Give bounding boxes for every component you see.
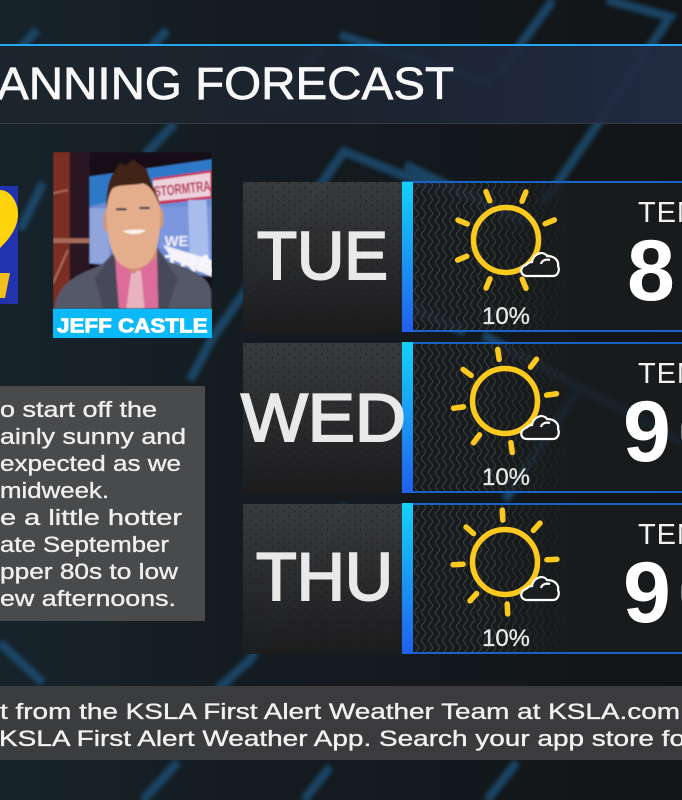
anchor photo: Jeff Castle: JEFF CASTLE <box>57 314 208 337</box>
title band: ANNING FORECAST <box>0 58 454 109</box>
anchor photo: Jeff Castle: STORMTRA <box>153 179 212 201</box>
forecast summary text box: pper 80s to low <box>0 559 178 584</box>
Tuesday row: TUE <box>257 218 388 294</box>
bottom information band: t from the KSLA First Alert Weather Team at KSLA.com <box>0 699 680 724</box>
Wednesday row: WED <box>241 380 406 456</box>
forecast summary text box: expected as we <box>0 451 181 476</box>
Tuesday row <box>243 172 682 332</box>
anchor photo: Jeff Castle: WE <box>165 234 188 250</box>
forecast summary text box: ate September <box>0 532 169 557</box>
Wednesday row <box>241 342 682 493</box>
Thursday row: 10% <box>482 625 530 652</box>
forecast summary text box: o start off the <box>0 397 157 422</box>
forecast summary text box: ainly sunny and <box>0 424 186 449</box>
title band <box>0 44 682 124</box>
bottom information band: KSLA First Alert Weather App. Search your app store fo <box>0 726 682 751</box>
station logo <box>0 186 18 304</box>
Tuesday row: 10% <box>482 303 530 330</box>
anchor photo: Jeff Castle: TRAC <box>165 251 231 278</box>
Thursday row <box>243 503 682 654</box>
forecast summary text box: midweek. <box>0 478 109 503</box>
anchor photo: Jeff Castle <box>53 152 212 338</box>
Wednesday row: 10% <box>482 464 530 491</box>
bottom information band <box>0 686 682 760</box>
forecast summary text box <box>0 386 205 621</box>
Thursday row: THU <box>256 539 393 615</box>
forecast summary text box: ew afternoons. <box>0 586 176 611</box>
forecast summary text box: e a little hotter <box>0 505 182 530</box>
Tuesday row: 8 <box>627 223 675 319</box>
